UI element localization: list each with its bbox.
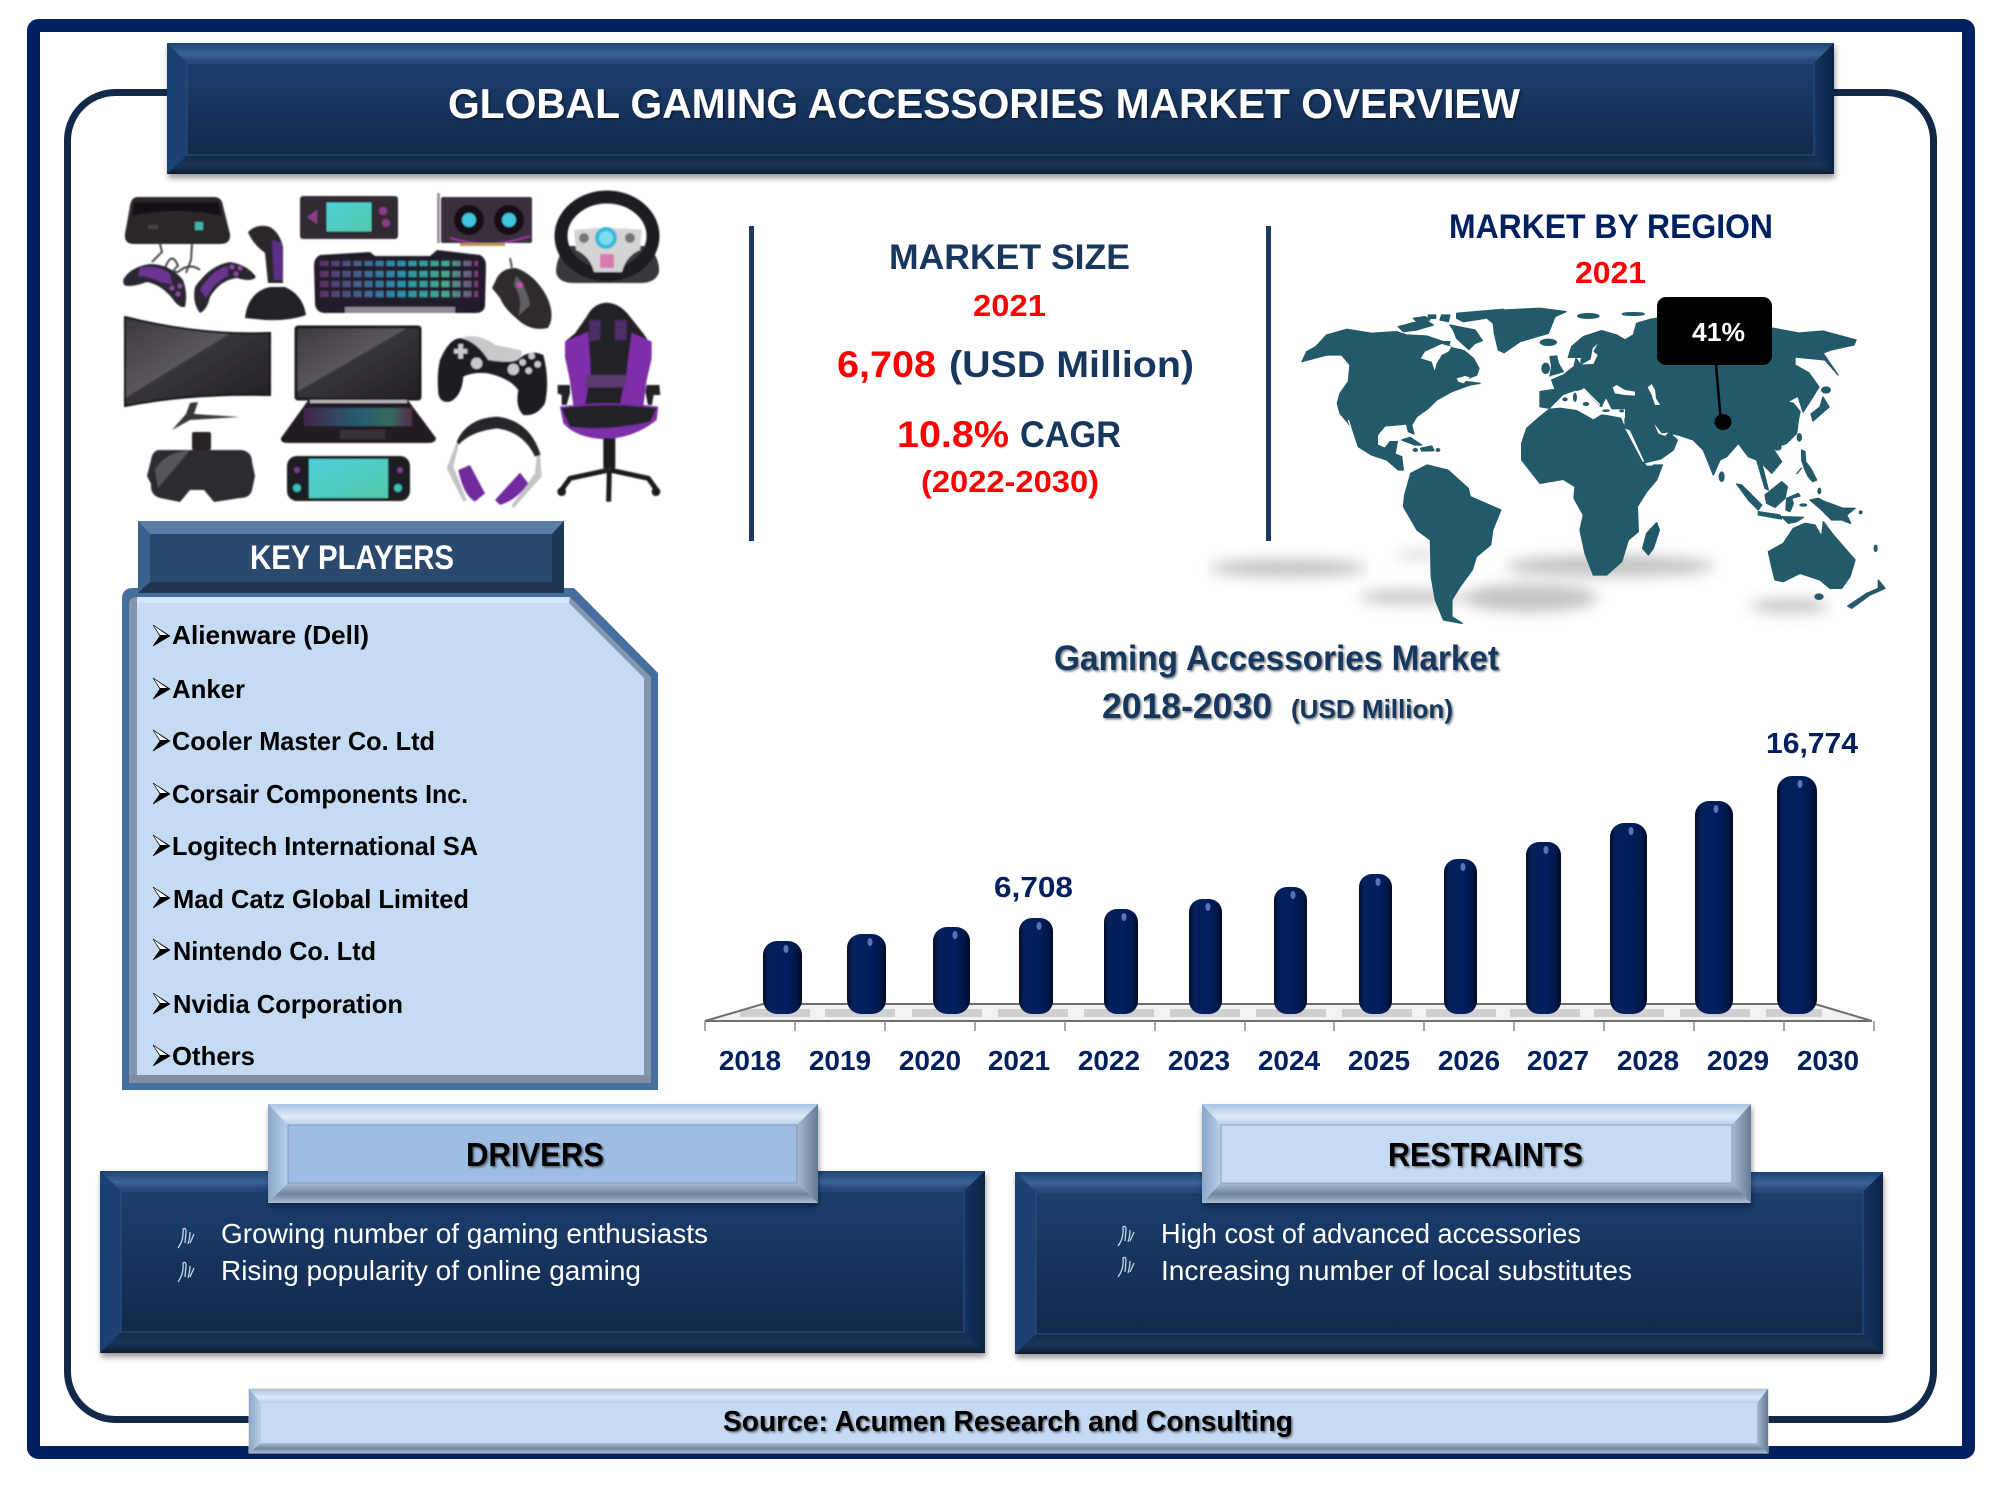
icon: laptop	[281, 327, 436, 443]
year labels: 2023	[1168, 1045, 1230, 1076]
market size block: CAGR	[1020, 414, 1121, 455]
market size block: MARKET SIZE	[889, 238, 1130, 277]
ireland and britain	[1542, 363, 1549, 373]
key player names: Cooler Master Co. Ltd	[172, 726, 435, 756]
japan	[1811, 397, 1829, 421]
icon: bullet glyph	[178, 1228, 194, 1248]
australia	[1768, 522, 1855, 588]
market by region heading	[1449, 208, 1773, 290]
market size block: (2022-2030)	[921, 464, 1099, 499]
bar highlights	[784, 780, 1802, 953]
restraints list: Increasing number of local substitutes	[1161, 1255, 1632, 1286]
year labels: 2028	[1617, 1045, 1679, 1076]
drivers list	[178, 1218, 708, 1286]
restraints heading	[1202, 1104, 1751, 1203]
caribbean	[1402, 437, 1434, 451]
icon: joystick	[245, 226, 306, 320]
year labels: 2020	[899, 1045, 961, 1076]
icon: bullet glyph	[1118, 1226, 1134, 1246]
year labels: 2021	[988, 1045, 1050, 1076]
year labels: 2025	[1348, 1045, 1410, 1076]
eurasia	[1540, 317, 1856, 490]
bar chart: 16,774	[1766, 728, 1858, 760]
bar chart	[705, 728, 1874, 1076]
icon: RGB keyboard	[314, 250, 486, 313]
restraints heading: RESTRAINTS	[1388, 1136, 1583, 1173]
drivers list: Rising popularity of online gaming	[221, 1255, 641, 1286]
africa	[1522, 408, 1662, 575]
key players heading: KEY PLAYERS	[250, 539, 454, 577]
market size block: 6,708	[837, 344, 936, 385]
key player names	[153, 620, 478, 1071]
south east asia islands	[1719, 472, 1724, 481]
year labels	[719, 1045, 1859, 1076]
icon: gaming chair	[557, 303, 660, 502]
chart title	[1054, 639, 1499, 726]
icon: handheld console	[300, 196, 398, 239]
key players heading	[138, 521, 564, 593]
icon: graphics card	[437, 193, 532, 246]
key player names: Mad Catz Global Limited	[173, 884, 469, 914]
restraints list	[1118, 1218, 1632, 1286]
drivers heading: DRIVERS	[466, 1136, 604, 1173]
key player names: Logitech International SA	[172, 831, 478, 861]
iceland, svalbard, arctic russia islands	[1540, 339, 1556, 345]
source bar	[249, 1389, 1768, 1453]
market size block: 2021	[973, 288, 1046, 323]
madagascar	[1643, 523, 1659, 555]
icon: gamepad	[438, 336, 547, 415]
title banner	[167, 43, 1834, 174]
title text: GLOBAL GAMING ACCESSORIES MARKET OVERVIEW	[448, 80, 1520, 127]
key player names: Nintendo Co. Ltd	[173, 936, 376, 966]
key player names: Anker	[172, 674, 245, 704]
year labels: 2018	[719, 1045, 781, 1076]
seas and gulfs	[1348, 339, 1668, 466]
chart title: (USD Million)	[1291, 694, 1453, 724]
bars 2018 to 2030	[763, 776, 1817, 1014]
south america	[1404, 465, 1501, 623]
icon: steering wheel	[556, 197, 659, 283]
market size block	[837, 238, 1194, 499]
new zealand	[1848, 580, 1885, 608]
restraints list: High cost of advanced accessories	[1161, 1218, 1581, 1249]
key player names: Alienware (Dell)	[172, 620, 369, 650]
key player names: Others	[172, 1041, 255, 1071]
market by region heading: MARKET BY REGION	[1449, 208, 1773, 246]
icon: headset	[447, 417, 542, 508]
callout pointer and dot	[1714, 365, 1732, 430]
world map with callout	[1208, 297, 1885, 623]
year labels: 2026	[1438, 1045, 1500, 1076]
arctic islands	[1398, 309, 1503, 350]
market region: divider	[1266, 226, 1271, 541]
market size block: 10.8%	[897, 414, 1009, 455]
market size: divider	[749, 226, 754, 541]
icon: curved monitor	[125, 317, 270, 430]
key player names: Corsair Components Inc.	[172, 779, 468, 809]
panel: restraints	[1015, 1172, 1883, 1354]
chart floor	[705, 1004, 1874, 1031]
key player names: Nvidia Corporation	[173, 989, 403, 1019]
icon: gaming mouse	[492, 258, 552, 329]
chart title: Gaming Accessories Market	[1054, 639, 1499, 678]
north america	[1302, 329, 1480, 470]
gaming accessories illustration	[123, 193, 660, 508]
drivers list: Growing number of gaming enthusiasts	[221, 1218, 708, 1249]
source text: Source: Acumen Research and Consulting	[723, 1406, 1293, 1438]
icon: VR headset	[147, 432, 255, 502]
callout 41%	[1657, 297, 1772, 365]
icon: console with controllers	[123, 197, 256, 313]
drivers heading	[268, 1104, 818, 1203]
callout 41%: 41%	[1692, 317, 1745, 347]
greenland	[1485, 308, 1566, 353]
market size block: (USD Million)	[949, 344, 1194, 385]
year labels: 2019	[809, 1045, 871, 1076]
value labels: 6,708	[994, 872, 1073, 904]
year labels: 2024	[1258, 1045, 1321, 1076]
chart title: 2018-2030	[1102, 687, 1272, 726]
market by region heading: 2021	[1575, 255, 1646, 290]
year labels: 2029	[1707, 1045, 1769, 1076]
year labels: 2022	[1078, 1045, 1140, 1076]
year labels: 2027	[1527, 1045, 1589, 1076]
icon: portable console	[287, 456, 410, 501]
panel: drivers	[100, 1171, 985, 1353]
year labels: 2030	[1797, 1045, 1859, 1076]
panel: key players list	[122, 588, 658, 1090]
